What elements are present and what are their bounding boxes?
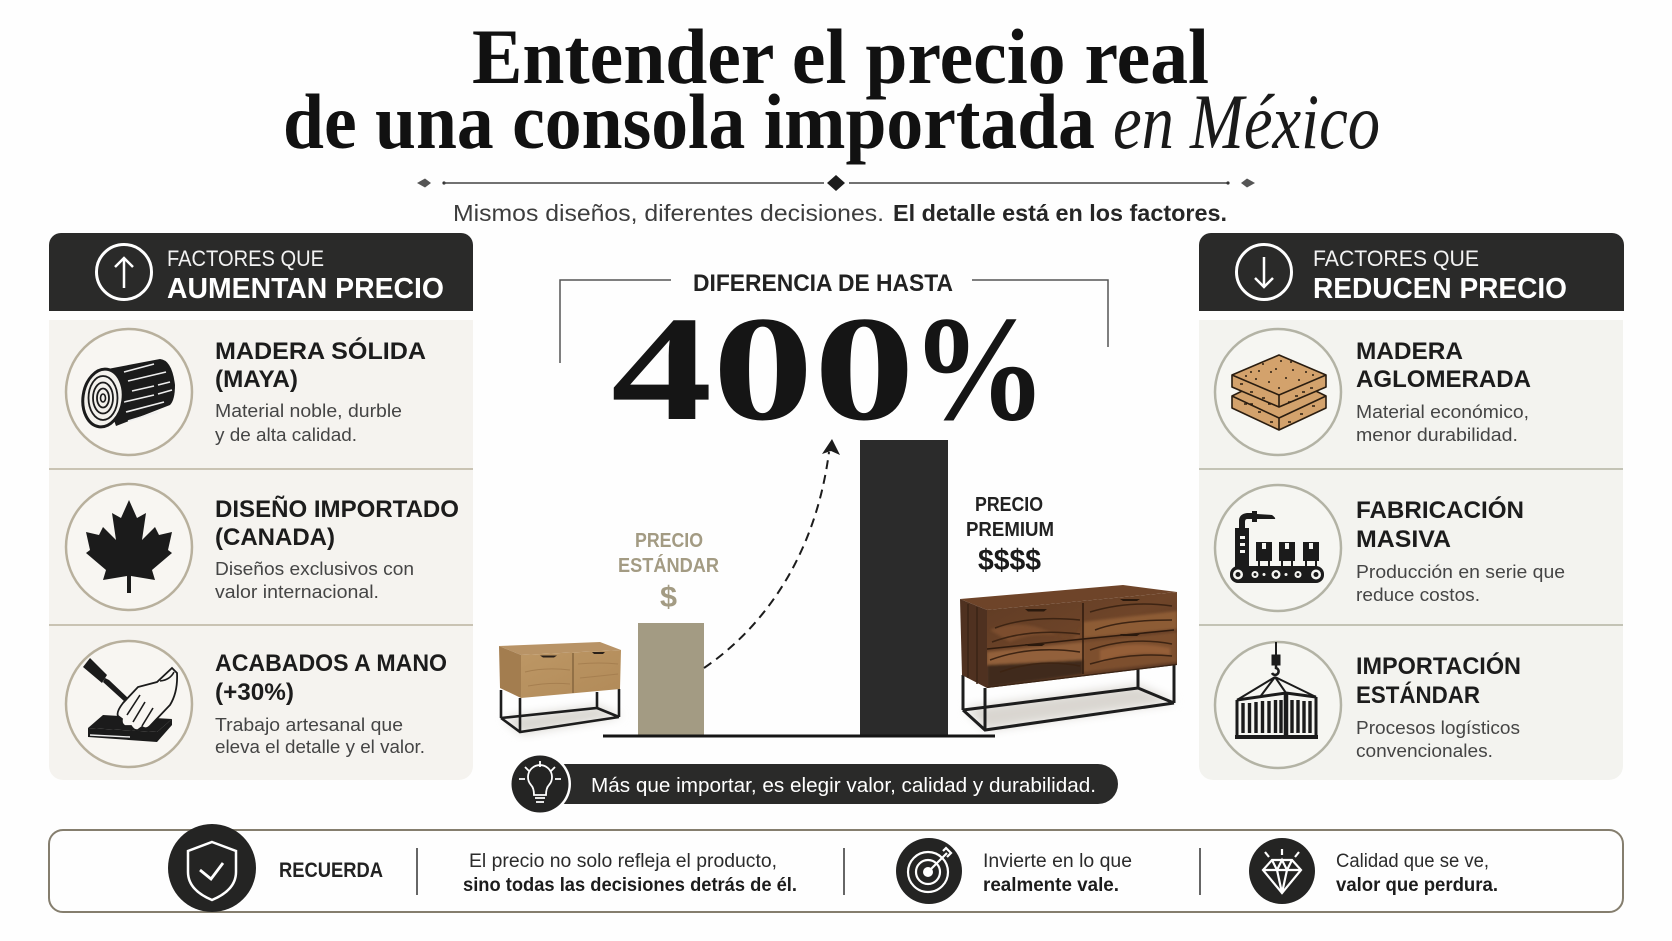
card: importación estándar	[1215, 642, 1521, 768]
card: importación estándar: Procesos logísticos	[1356, 718, 1520, 738]
callout: más que importar	[509, 753, 1118, 815]
header: aumentan precio: AUMENTAN PRECIO	[167, 273, 444, 305]
label: precio estándar: ESTÁNDAR	[618, 554, 719, 577]
label: precio estándar: PRECIO	[635, 530, 703, 552]
small console	[499, 642, 622, 734]
panel: factores que reducen precio	[1199, 233, 1624, 780]
card: importación estándar: ESTÁNDAR	[1356, 681, 1480, 709]
card: madera aglomerada: AGLOMERADA	[1356, 366, 1531, 393]
card: diseño importado	[66, 484, 459, 610]
icon: particle board	[1232, 355, 1326, 430]
large console	[960, 585, 1177, 730]
icon: hanging container	[1235, 642, 1318, 738]
callout: diferencia de hasta 400%: DIFERENCIA DE HASTA	[693, 270, 953, 297]
text: invierte: realmente vale.	[983, 875, 1119, 896]
icon: maple leaf	[86, 500, 172, 593]
panel: factores que aumentan precio	[49, 233, 473, 780]
card: acabados a mano: Trabajo artesanal que	[215, 715, 403, 735]
icon: chisel and hand	[83, 658, 177, 742]
chart: precio estándar vs premium	[499, 439, 1177, 738]
label: precio premium	[966, 494, 1054, 577]
label: precio premium: $$$$	[978, 544, 1041, 577]
card: fabricación masiva	[1215, 485, 1565, 611]
card: diseño importado: DISEÑO IMPORTADO	[215, 495, 459, 523]
title: de una consola importada	[283, 78, 1095, 165]
icon: log	[79, 359, 175, 430]
text: el precio: sino todas las decisiones detrás de él.	[463, 875, 797, 896]
card: acabados a mano: (+30%)	[215, 679, 294, 706]
header: reducen precio: REDUCEN PRECIO	[1313, 273, 1567, 305]
text: calidad: valor que perdura.	[1336, 875, 1498, 896]
card: acabados a mano: ACABADOS A MANO	[215, 650, 447, 677]
card: fabricación masiva: Producción en serie que	[1356, 562, 1565, 582]
card: madera aglomerada	[1215, 329, 1531, 455]
card: fabricación masiva: MASIVA	[1356, 526, 1451, 553]
card: diseño importado: valor internacional.	[215, 582, 379, 602]
text: calidad: Calidad que se ve,	[1336, 851, 1489, 872]
text: invierte	[983, 851, 1132, 896]
card: importación estándar: IMPORTACIÓN	[1356, 652, 1521, 680]
card: acabados a mano: eleva el detalle y el valor.	[215, 737, 425, 757]
card: diseño importado: Diseños exclusivos con	[215, 559, 414, 579]
callout: diferencia de hasta 400%: %	[911, 286, 1047, 452]
title: en México	[1113, 78, 1380, 165]
label: precio estándar: $	[660, 581, 677, 614]
axis	[603, 734, 995, 738]
text: el precio: El precio no solo refleja el producto,	[469, 851, 777, 872]
card: fabricación masiva: FABRICACIÓN	[1356, 496, 1524, 524]
label: precio estándar	[618, 530, 719, 614]
card: madera sólida	[66, 329, 426, 455]
title	[283, 13, 1380, 165]
label: precio premium: PREMIUM	[966, 519, 1054, 541]
icon: shield check	[168, 824, 256, 912]
icon: lightbulb	[509, 753, 571, 815]
subtitle: El detalle está en los factores.	[893, 200, 1227, 226]
card: acabados a mano	[66, 641, 447, 767]
header: aumentan precio	[49, 233, 473, 311]
card: diseño importado: (CANADA)	[215, 524, 335, 551]
subtitle: Mismos diseños, diferentes decisiones.	[453, 200, 884, 226]
card: madera sólida: y de alta calidad.	[215, 425, 357, 445]
header: reducen precio	[1199, 233, 1624, 311]
title: Entender el precio real	[472, 13, 1209, 100]
bar: precio estándar	[638, 623, 704, 735]
text: invierte: Invierte en lo que	[983, 851, 1132, 872]
card: madera sólida: Material noble, durble	[215, 401, 402, 421]
label: precio premium: PRECIO	[975, 494, 1043, 516]
panel: recuerda: RECUERDA	[279, 859, 383, 882]
callout: diferencia de hasta 400%	[560, 270, 1108, 452]
card: madera aglomerada: menor durabilidad.	[1356, 425, 1518, 445]
callout: diferencia de hasta 400%: 400	[611, 286, 915, 452]
icon: target	[896, 838, 962, 904]
card: importación estándar: convencionales.	[1356, 741, 1493, 761]
card: madera sólida: MADERA SÓLIDA	[215, 337, 426, 365]
bar: precio premium	[860, 440, 948, 735]
subtitle	[453, 200, 1227, 226]
text: el precio	[463, 851, 797, 896]
panel: recuerda	[49, 824, 1623, 912]
text: calidad	[1336, 851, 1498, 896]
arrow: dashed growth curve	[704, 439, 840, 668]
card: madera sólida: (MAYA)	[215, 366, 298, 393]
header: aumentan precio: FACTORES QUE	[167, 246, 324, 271]
header: reducen precio: FACTORES QUE	[1313, 246, 1479, 271]
card: madera aglomerada: MADERA	[1356, 338, 1463, 365]
ornament divider	[417, 175, 1255, 191]
callout: más que importar: Más que importar, es elegir valor, calidad y durabilidad.	[591, 775, 1096, 797]
card: madera aglomerada: Material económico,	[1356, 402, 1529, 422]
icon: diamond	[1249, 838, 1315, 904]
icon: factory conveyor	[1230, 511, 1324, 583]
card: fabricación masiva: reduce costos.	[1356, 585, 1480, 605]
